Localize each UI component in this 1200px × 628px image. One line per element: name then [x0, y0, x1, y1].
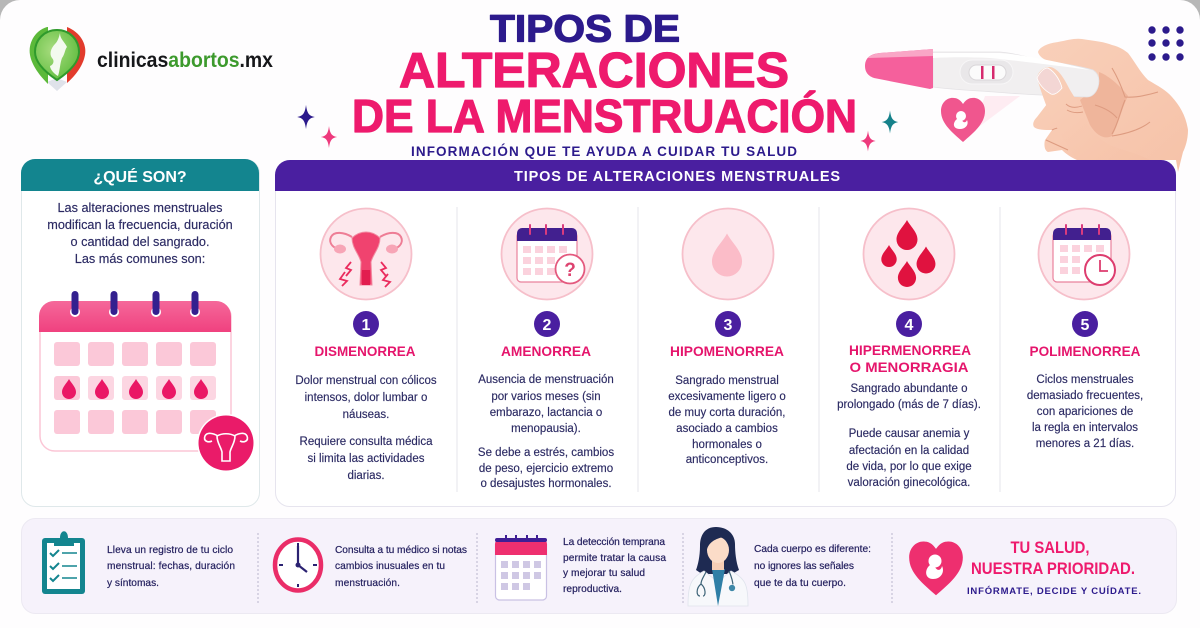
- heading: HIPOMENORREA: [670, 343, 784, 359]
- description: Puede causar anemia y: [849, 428, 970, 440]
- hand back: [1033, 39, 1188, 172]
- description: o desajustes hormonales.: [480, 478, 612, 490]
- icon: calendar question: ?: [564, 260, 576, 281]
- description: prolongado (más de 7 días).: [837, 399, 981, 411]
- closing heading: NUESTRA PRIORIDAD.: [971, 560, 1135, 578]
- logo: [30, 27, 273, 91]
- column 2: amenorrea: [478, 208, 614, 490]
- logo wordmark: clinicasabortos.mx: [97, 49, 273, 72]
- icon: wall clock: [275, 540, 321, 590]
- curled fingers: [1080, 72, 1128, 137]
- tip text: cambios inusuales en tu: [335, 561, 445, 572]
- description: Sangrado abundante o: [850, 383, 968, 395]
- tip text: y mejorar tu salud: [563, 568, 645, 579]
- tip text: permite tratar la causa: [563, 553, 666, 564]
- description: excesivamente ligero o: [668, 391, 786, 403]
- hand holding pregnancy test: [865, 39, 1188, 172]
- tip text: menstruación.: [335, 578, 400, 589]
- heading: O MENORRAGIA: [850, 359, 968, 375]
- title: DE LA MENSTRUACIÓN: [352, 90, 857, 142]
- description: la regla en intervalos: [1032, 422, 1138, 434]
- number badge 2: 2: [543, 317, 552, 334]
- description: de muy corta duración,: [669, 407, 785, 419]
- description: de peso, ejercicio extremo: [479, 463, 613, 475]
- tip text: [754, 544, 871, 589]
- heading: HIPERMENORREA: [849, 342, 971, 358]
- description: menopausia).: [511, 423, 581, 435]
- column 1: dismenorrea: [295, 208, 437, 482]
- sparkles: [297, 105, 898, 151]
- description: afectación en la calidad: [849, 445, 969, 457]
- intro text: [47, 201, 233, 266]
- icon: four blood drops: [864, 208, 954, 300]
- description: Ciclos menstruales: [1036, 374, 1134, 386]
- tip text: La detección temprana: [563, 537, 665, 548]
- test pink cap: [865, 49, 933, 89]
- description: con apariciones de: [1037, 406, 1133, 418]
- number badge 4: [896, 311, 922, 337]
- intro text: o cantidad del sangrado.: [71, 235, 209, 249]
- description: Sangrado menstrual: [675, 375, 779, 387]
- description: intensos, dolor lumbar o: [305, 392, 427, 404]
- description: de vida, por lo que exige: [846, 461, 972, 473]
- description: por varios meses (sin: [491, 391, 601, 403]
- tip text: menstrual: fechas, duración: [107, 561, 235, 572]
- intro text: Las más comunes son:: [75, 252, 205, 266]
- heading: [849, 342, 971, 375]
- thumb nail: [1037, 68, 1062, 94]
- number badge 1: 1: [362, 317, 371, 334]
- description: [478, 374, 614, 490]
- intro text: Las alteraciones menstruales: [57, 201, 223, 215]
- description: diarias.: [347, 470, 385, 482]
- description: si limita las actividades: [308, 453, 425, 465]
- description: Dolor menstrual con cólicos: [295, 375, 437, 387]
- tip text: reproductiva.: [563, 584, 622, 595]
- description: menores a 21 días.: [1036, 438, 1134, 450]
- panel: tipos de alteraciones: TIPOS DE ALTERACIONES MENSTRUALES: [514, 169, 840, 185]
- uterus badge: [197, 414, 255, 472]
- test window: [960, 60, 1013, 84]
- description: anticonceptivos.: [686, 454, 768, 466]
- heading: DISMENORREA: [314, 343, 416, 359]
- description: valoración ginecológica.: [848, 477, 970, 489]
- column 4: hipermenorrea: [837, 208, 981, 489]
- icon: clipboard: [42, 531, 85, 594]
- description: [1027, 374, 1143, 450]
- heading: AMENORREA: [501, 343, 591, 359]
- column 5: polimenorrea: [1027, 208, 1143, 450]
- intro text: modifican la frecuencia, duración: [47, 218, 233, 232]
- number badge 2: [534, 311, 560, 337]
- panel: tipos de alteraciones: [275, 160, 1176, 506]
- icon: single drop: [682, 208, 774, 300]
- description: Requiere consulta médica: [300, 436, 433, 448]
- description: embarazo, lactancia o: [490, 407, 602, 419]
- tip text: [335, 545, 467, 589]
- test body: [933, 52, 1099, 97]
- tip text: Lleva un registro de tu ciclo: [107, 545, 233, 556]
- number badge 1: [353, 311, 379, 337]
- description: asociado a cambios: [676, 423, 778, 435]
- icon: pink heart with fetus: [941, 96, 1020, 142]
- title: TIPOS DE: [490, 8, 680, 50]
- subtitle: INFORMACIÓN QUE TE AYUDA A CUIDAR TU SALUD: [411, 144, 797, 159]
- number badge 4: 4: [905, 317, 914, 334]
- description: demasiado frecuentes,: [1027, 390, 1143, 402]
- description: náuseas.: [343, 409, 389, 421]
- closing heading: [971, 539, 1135, 578]
- tip 2: [275, 540, 467, 590]
- icon: heart with fetus: [909, 541, 963, 595]
- tip text: [107, 545, 235, 589]
- thumb: [1037, 67, 1150, 160]
- panel: bottom tips strip: [22, 518, 1176, 614]
- closing heading: TU SALUD,: [1010, 539, 1090, 557]
- description: [668, 375, 786, 466]
- closing: tu salud: [909, 539, 1141, 597]
- tip text: [563, 537, 666, 595]
- number badge 5: [1072, 311, 1098, 337]
- closing tagline: INFÓRMATE, DECIDE Y CUÍDATE.: [967, 585, 1141, 597]
- icon: calendar question: [502, 208, 592, 300]
- description: [837, 383, 981, 489]
- number badge 5: 5: [1081, 317, 1090, 334]
- panel header: tipos: [275, 160, 1176, 191]
- tip text: no ignores las señales: [754, 561, 854, 572]
- tip text: que te da tu cuerpo.: [754, 578, 846, 589]
- title: [352, 8, 857, 159]
- icon: calendar: [495, 535, 547, 600]
- tip text: y síntomas.: [107, 578, 159, 589]
- panel: qué son: ¿QUÉ SON?: [93, 167, 187, 186]
- number badge 3: 3: [724, 317, 733, 334]
- tip text: Cada cuerpo es diferente:: [754, 544, 871, 555]
- heading: POLIMENORREA: [1030, 343, 1140, 359]
- icon: doctor: [688, 527, 748, 606]
- panel: qué son: [21, 159, 260, 506]
- icon: calendar clock: [1038, 208, 1130, 300]
- tip 3: [495, 535, 666, 600]
- number badge 3: [715, 311, 741, 337]
- column 3: hipomenorrea: [668, 208, 786, 466]
- tip 4: [688, 527, 871, 606]
- description: hormonales o: [692, 439, 762, 451]
- tip text: Consulta a tu médico si notas: [335, 545, 467, 556]
- tip 1: [42, 531, 235, 594]
- description: Ausencia de menstruación: [478, 374, 614, 386]
- icon: uterus with pain: [320, 208, 412, 300]
- calendar rings: [70, 291, 200, 317]
- panel header: qué son: [21, 159, 259, 191]
- description: [295, 375, 437, 482]
- dot grid: [1148, 26, 1184, 61]
- description: Se debe a estrés, cambios: [478, 447, 614, 459]
- title: ALTERACIONES: [399, 44, 789, 98]
- calendar illustration: [39, 291, 255, 472]
